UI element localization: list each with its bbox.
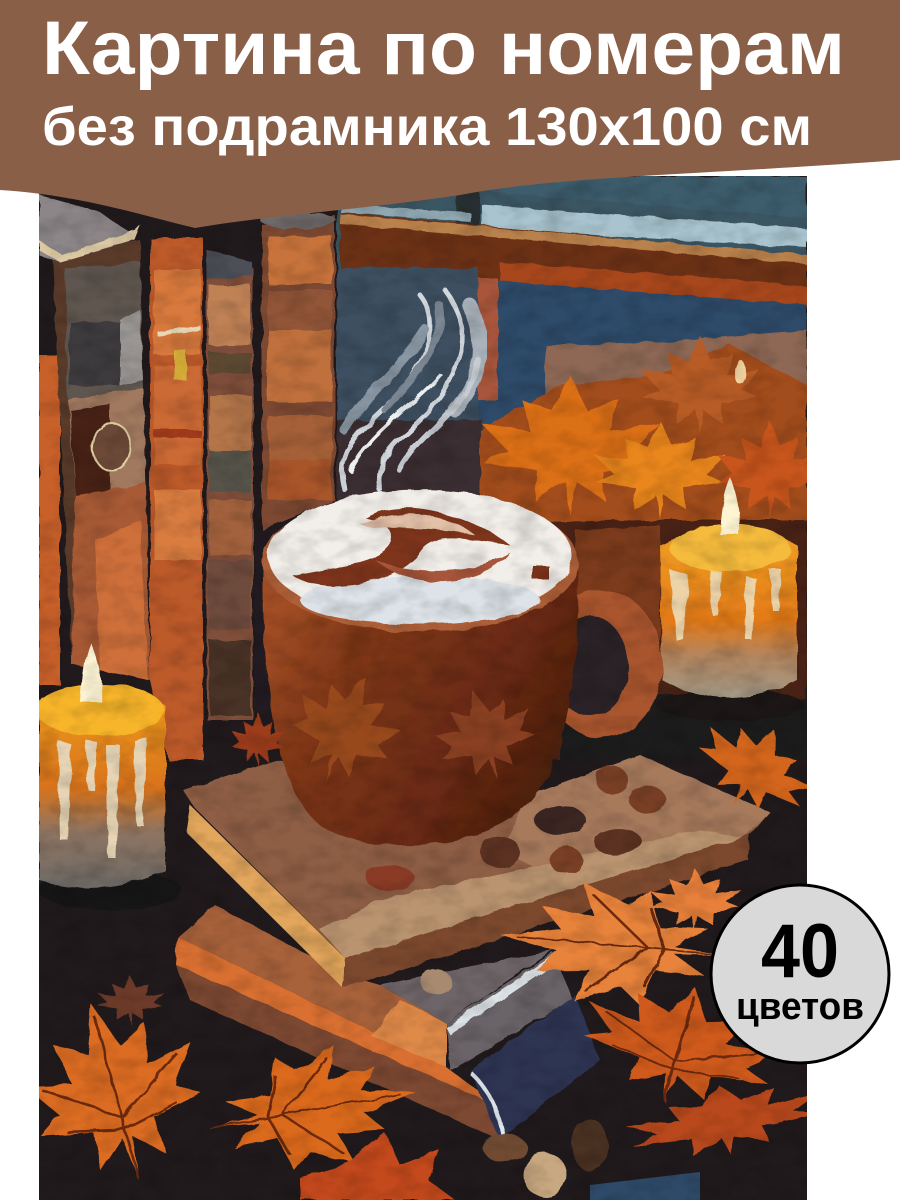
coffee beans	[366, 766, 666, 1197]
subtitle: без подрамника 130х100 см	[42, 97, 812, 157]
third brown book	[207, 268, 253, 720]
far left orange book	[39, 355, 60, 685]
steam	[342, 290, 480, 490]
second orange book	[150, 238, 203, 760]
fallen maple leaves	[9, 702, 829, 1200]
left candle	[36, 642, 182, 910]
first leather book	[52, 240, 148, 680]
coffee mug	[263, 570, 662, 846]
blue cloth under beans	[590, 1172, 700, 1200]
badge: 40 colours	[711, 885, 889, 1063]
window and background	[337, 176, 807, 760]
badge: 40 colours: цветов	[736, 986, 864, 1028]
lower book stack	[176, 905, 600, 1140]
fourth brown book	[262, 215, 335, 530]
top book	[183, 755, 770, 988]
badge: 40 colours: 40	[761, 909, 839, 994]
title: Картина по номерам	[42, 6, 845, 91]
right candle	[656, 478, 804, 721]
row of books	[39, 195, 336, 760]
brush texture overlay	[39, 176, 807, 1200]
foam with cocoa swirl	[262, 490, 578, 632]
banner background	[0, 0, 900, 228]
painting: coffee and autumn still life	[9, 176, 829, 1200]
autumn leaves behind mug	[481, 336, 823, 519]
